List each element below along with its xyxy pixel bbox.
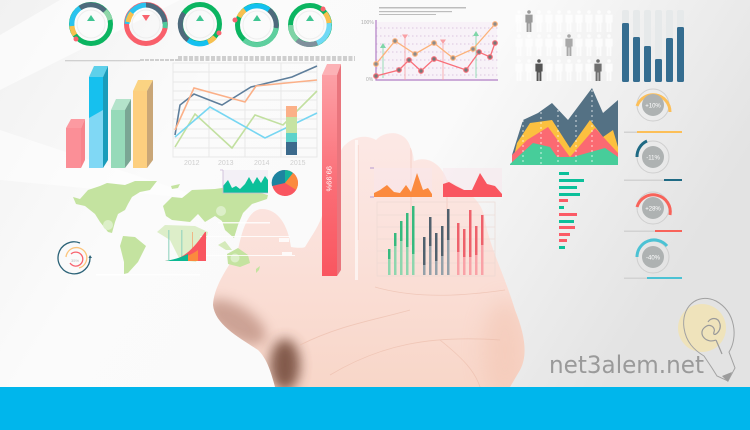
red mini area chart [443, 168, 502, 197]
gauge: -40%: -40% [646, 256, 661, 262]
gauge: +28% [624, 192, 682, 232]
axis labels: 0% [366, 77, 374, 83]
ring chart 2 [126, 4, 166, 44]
ring chart 4 [232, 6, 276, 45]
blue footer band [0, 387, 750, 430]
header rule lines [379, 7, 466, 15]
gauge: -40% [624, 240, 682, 279]
dual line chart with markers [361, 20, 498, 83]
circular refresh icon: 35% [71, 258, 79, 263]
green bars [388, 206, 414, 275]
year axis labels: 2013 [218, 160, 234, 167]
year axis labels: 2012 [184, 160, 200, 167]
ring chart 3 [180, 4, 222, 44]
layered mountain area chart [510, 88, 618, 165]
world map [73, 181, 268, 274]
thin grey histogram strip [65, 58, 355, 61]
green bar [111, 99, 131, 168]
year axis labels [184, 160, 306, 167]
logo text: net3alem.net [549, 351, 704, 379]
logo: lightbulb [678, 298, 735, 382]
semi-transparent thumb overlay stripes [96, 222, 295, 276]
hand photo [213, 133, 524, 387]
ring chart 1 [72, 4, 110, 44]
orange mini area chart [370, 168, 432, 197]
red bar [66, 119, 85, 168]
3D bar chart [66, 66, 153, 168]
orange bar [133, 80, 153, 168]
blue vertical bars [622, 10, 684, 82]
ring chart 5 [290, 6, 330, 45]
year axis labels: 2014 [254, 160, 270, 167]
gauge: +10%: +10% [645, 104, 661, 110]
axis labels [361, 20, 374, 83]
red bars [457, 210, 484, 275]
pie chart [272, 170, 298, 196]
line chart 2012-2015 [173, 63, 317, 167]
slate bars [423, 209, 450, 275]
people pictogram [515, 10, 613, 81]
bar value: 99.99% [324, 166, 334, 192]
vertical grouped bars chart [377, 202, 495, 276]
gauge: +28%: +28% [645, 206, 661, 212]
horizontal bar list [559, 172, 584, 249]
circular refresh icon [58, 242, 92, 274]
teal mini area chart [220, 170, 268, 193]
gauge: +10% [624, 89, 682, 133]
stacked legend column [286, 106, 297, 155]
gauge: -11% [624, 141, 682, 181]
ring charts row [72, 4, 330, 45]
year axis labels: 2015 [290, 160, 306, 167]
axis labels: 100% [361, 20, 374, 26]
blue bar [89, 66, 108, 168]
small stacked area chart on map [165, 230, 206, 261]
big red percentage bar [322, 64, 341, 276]
gauge: -11%: -11% [646, 156, 660, 162]
